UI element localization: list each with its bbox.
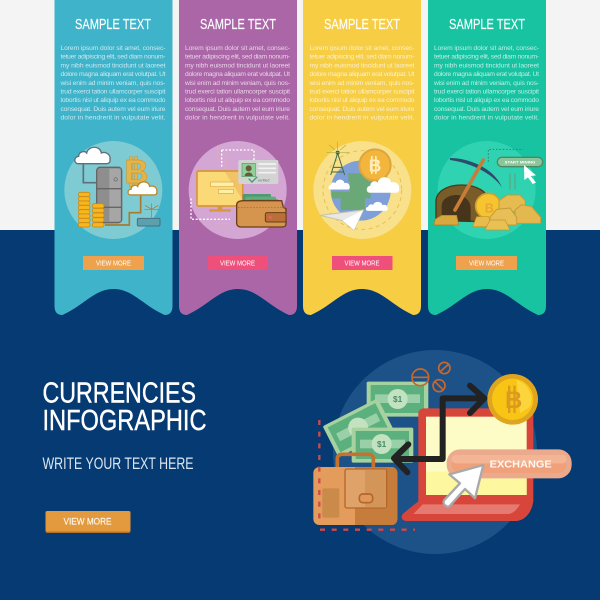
button: VIEW MORE xyxy=(220,259,255,268)
heading: SAMPLE TEXT xyxy=(449,17,525,33)
dashed guide xyxy=(319,420,415,530)
text block: trud exerci tation ullamcorper suscipit xyxy=(60,88,166,96)
text block: lobortis nisl ut aliquip ex ea commodo xyxy=(434,97,539,104)
main button xyxy=(46,511,130,533)
text block: my nibh euismod tincidunt ut laoreet xyxy=(60,62,166,69)
button: VIEW MORE xyxy=(344,259,380,268)
button: VIEW MORE xyxy=(469,259,504,268)
icon: server, clouds and coins xyxy=(64,141,162,239)
illustration: currency exchange xyxy=(313,350,572,554)
text block: wisi enim ad minim veniam, quis nos- xyxy=(60,80,166,87)
text block: lobortis nisl ut aliquip ex ea commodo xyxy=(310,97,415,104)
icon: briefcase xyxy=(313,454,397,525)
text block: consequat. Duis autem vel eum iriure xyxy=(60,106,166,113)
text block: my nibh euismod tincidunt ut laoreet xyxy=(185,62,290,69)
icon: pickaxe, mine and gold: B xyxy=(485,201,494,215)
heading: SAMPLE TEXT xyxy=(75,17,151,33)
text block: trud exerci tation ullamcorper suscipit xyxy=(310,88,415,96)
text block: lobortis nisl ut aliquip ex ea commodo xyxy=(185,97,290,104)
main button: VIEW MORE xyxy=(64,516,112,528)
text block: trud exerci tation ullamcorper suscipit xyxy=(185,88,290,96)
title: INFOGRAPHIC xyxy=(42,405,206,437)
text block: tetuer adipiscing elit, sed diam nonum- xyxy=(60,54,166,61)
icon: laptop xyxy=(402,408,533,521)
icon: pickaxe, mine and gold xyxy=(434,141,543,239)
icon: cursor xyxy=(444,465,483,507)
text block: my nibh euismod tincidunt ut laoreet xyxy=(434,62,539,69)
icon: minus circles xyxy=(412,362,450,392)
heading: SAMPLE TEXT xyxy=(324,17,400,33)
text block: tetuer adipiscing elit, sed diam nonum- xyxy=(310,54,414,61)
text block: lobortis nisl ut aliquip ex ea commodo xyxy=(60,97,166,104)
text block xyxy=(433,45,539,122)
text block: my nibh euismod tincidunt ut laoreet xyxy=(310,62,415,69)
button xyxy=(332,256,392,270)
icon: monitor, ID card and wallet xyxy=(189,141,287,239)
button: exchange: EXCHANGE xyxy=(490,460,552,471)
text block: Lorem ipsum dolor sit amet, consec- xyxy=(310,45,414,52)
text block: dolor in hendrerit in vulputate velit. xyxy=(185,115,290,122)
background top xyxy=(0,0,600,230)
icon: banknotes: $1 xyxy=(377,439,387,449)
text block: dolor in hendrerit in vulputate velit. xyxy=(310,115,415,122)
button: VIEW MORE xyxy=(96,259,131,268)
button: exchange xyxy=(447,449,572,478)
text block: consequat. Duis autem vel eum iriure xyxy=(434,106,539,113)
text block: Lorem ipsum dolor sit amet, consec- xyxy=(60,45,166,52)
icon: monitor, ID card and wallet: verified xyxy=(258,179,269,183)
icon: globe, tower, coin and paper plane xyxy=(313,141,411,239)
text block: consequat. Duis autem vel eum iriure xyxy=(185,106,290,113)
button xyxy=(208,256,268,270)
icon: server, clouds and coins: B xyxy=(124,154,148,191)
button xyxy=(83,256,144,270)
text block: trud exerci tation ullamcorper suscipit xyxy=(434,88,539,96)
panel: green banner xyxy=(428,0,546,315)
text block xyxy=(184,45,290,122)
subtitle: WRITE YOUR TEXT HERE xyxy=(42,455,194,473)
icon backdrop circle xyxy=(333,350,537,554)
icon: bitcoin coin xyxy=(487,374,538,425)
arrows xyxy=(394,386,484,472)
text block: dolore magna aliquam erat volutpat. Ut xyxy=(185,71,290,78)
icon: banknotes: $1 xyxy=(393,394,403,404)
panel: yellow banner xyxy=(303,0,421,315)
text block: dolor in hendrerit in vulputate velit. xyxy=(434,115,539,122)
text block: Lorem ipsum dolor sit amet, consec- xyxy=(434,45,539,52)
text block: tetuer adipiscing elit, sed diam nonum- xyxy=(434,54,539,61)
text block: Lorem ipsum dolor sit amet, consec- xyxy=(185,45,290,52)
icon: bitcoin coin: B xyxy=(505,387,522,414)
text block: tetuer adipiscing elit, sed diam nonum- xyxy=(185,54,290,61)
text block: wisi enim ad minim veniam, quis nos- xyxy=(433,80,539,87)
text block xyxy=(308,45,415,122)
heading: SAMPLE TEXT xyxy=(200,17,276,33)
title xyxy=(42,378,206,437)
text block: wisi enim ad minim veniam, quis nos- xyxy=(184,80,290,87)
text block: dolore magna aliquam erat volutpat. Ut xyxy=(310,71,415,78)
text block: dolore magna aliquam erat volutpat. Ut xyxy=(434,71,539,78)
icon: globe, tower, coin and paper plane: B xyxy=(369,155,381,175)
panel: purple banner xyxy=(179,0,297,315)
text block: consequat. Duis autem vel eum iriure xyxy=(310,106,415,113)
title: CURRENCIES xyxy=(42,378,196,410)
icon: banknotes xyxy=(323,382,428,463)
button xyxy=(456,256,517,270)
icon: pickaxe, mine and gold: START MINING xyxy=(505,159,535,164)
panel: blue banner xyxy=(54,0,172,315)
text block xyxy=(60,45,166,122)
text block: wisi enim ad minim veniam, quis nos- xyxy=(308,80,414,87)
text block: dolor in hendrerit in vulputate velit. xyxy=(60,115,166,122)
background bottom xyxy=(0,230,600,600)
text block: dolore magna aliquam erat volutpat. Ut xyxy=(60,71,166,78)
